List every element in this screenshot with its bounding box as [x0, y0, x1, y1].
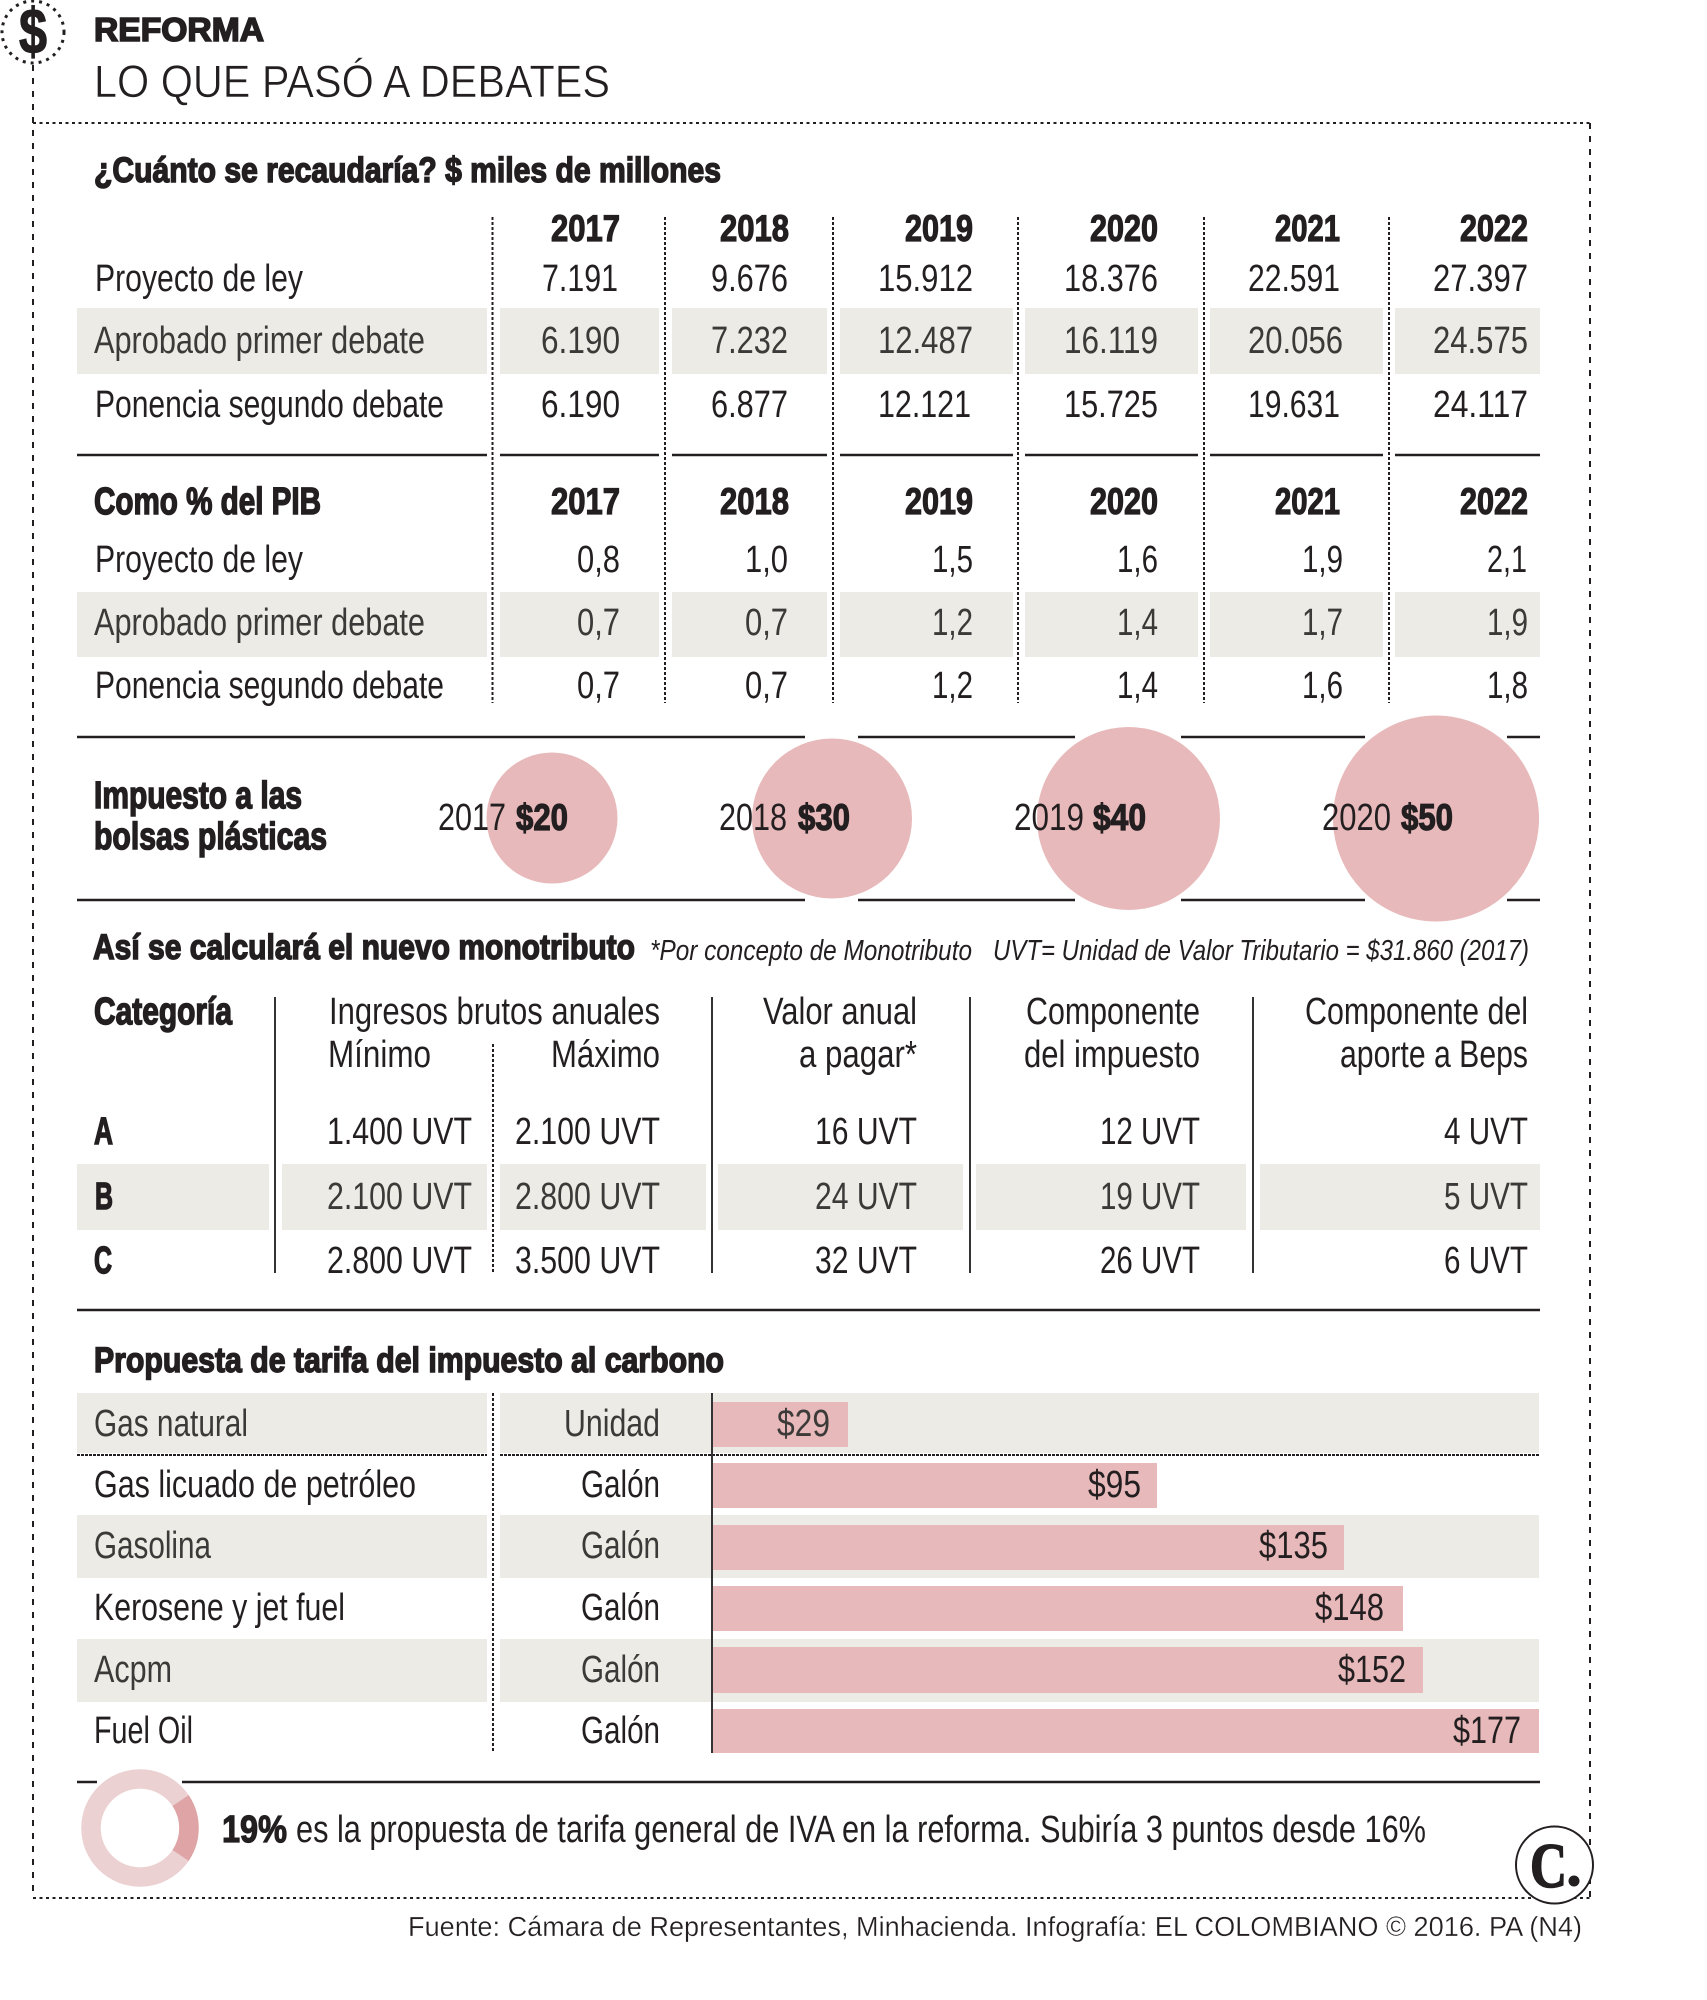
row: acpm: $152 [1338, 1649, 1406, 1691]
table: miles de millones: 6.877 [711, 384, 788, 426]
bubble: 2020 $50: 2020 [1322, 797, 1391, 839]
title block: REFORMA [94, 11, 264, 48]
bubble: 2018 $30: $30 [798, 797, 850, 838]
panel: tarifa de IVA [77, 1779, 1540, 1877]
table: miles de millones: Ponencia segundo debate [95, 384, 444, 426]
table: miles de millones: Proyecto de ley [95, 258, 303, 300]
table: miles de millones: 24.117 [1433, 384, 1528, 426]
row: gas licuado: Gas licuado de petróleo [94, 1464, 416, 1506]
row C: 2.800 UVT [327, 1240, 472, 1282]
table: como % del PIB: 2017 [551, 481, 620, 522]
row B [95, 1176, 1528, 1218]
row A: 16 UVT [815, 1111, 917, 1153]
table: como % del PIB: 0,7 [577, 665, 620, 707]
table: miles de millones: 12.487 [878, 320, 973, 362]
icon: dollar badge [2, 0, 64, 67]
row: gas natural: Unidad [564, 1403, 660, 1445]
table: como % del PIB: 2,1 [1487, 539, 1527, 581]
note: concepto y UVT: UVT= Unidad de Valor Tributario = $31.860 (2017) [993, 935, 1529, 967]
table: como % del PIB: 1,6 [1302, 665, 1343, 707]
logo: El Colombiano: C [1530, 1830, 1567, 1901]
heading: cuánto se recaudaría: ¿Cuánto se recaudaría? $ miles de millones [94, 151, 721, 190]
heading: impuesto a las bolsas: Impuesto a las [94, 775, 302, 817]
bubble: 2020 $50 [1322, 716, 1539, 922]
table: miles de millones: 2017 [551, 208, 620, 249]
row: gas natural: Gas natural [94, 1403, 248, 1445]
table: como % del PIB: 1,7 [1302, 602, 1343, 644]
table header [94, 991, 1528, 1076]
row: gas natural: $29 [777, 1403, 830, 1445]
row: gas licuado: Galón [581, 1464, 660, 1506]
row: fuel oil [94, 1710, 1521, 1752]
row A: 12 UVT [1100, 1111, 1200, 1153]
table: miles de millones: 7.191 [542, 258, 618, 300]
table: como % del PIB: 1,2 [932, 665, 973, 707]
table: como % del PIB: 1,5 [932, 539, 973, 581]
table: miles de millones: 6.190 [541, 320, 620, 362]
row: fuel oil: Galón [581, 1710, 660, 1752]
table: como % del PIB: 0,7 [745, 665, 788, 707]
row: kerosene: Kerosene y jet fuel [94, 1587, 345, 1629]
note: concepto y UVT [650, 935, 1529, 967]
row: gas licuado [94, 1464, 1141, 1506]
table: como % del PIB: 1,0 [745, 539, 788, 581]
logo: El Colombiano [1516, 1826, 1593, 1904]
table: como % del PIB: 2020 [1090, 481, 1158, 522]
title block: LO QUE PASÓ A DEBATES [94, 56, 610, 107]
row: gas licuado: $95 [1088, 1464, 1141, 1506]
row B: 19 UVT [1100, 1176, 1200, 1218]
row C: 6 UVT [1444, 1240, 1528, 1282]
heading: impuesto a las bolsas [94, 775, 327, 858]
table: como % del PIB: 1,4 [1117, 665, 1158, 707]
table: miles de millones: 24.575 [1433, 320, 1528, 362]
table header: a pagar* [799, 1034, 917, 1076]
row: kerosene: $148 [1315, 1587, 1384, 1629]
row: gasolina: Gasolina [94, 1525, 212, 1567]
row: gas natural [94, 1403, 830, 1445]
bubble: 2017 $20 [438, 752, 618, 884]
row: gasolina: Galón [581, 1525, 660, 1567]
table: miles de millones: 20.056 [1248, 320, 1343, 362]
heading: impuesto al carbono: Propuesta de tarifa del impuesto al carbono [94, 1341, 724, 1380]
callout text: IVA: 19% [222, 1809, 287, 1851]
note: concepto y UVT: *Por concepto de Monotributo [650, 935, 972, 967]
row C: 26 UVT [1100, 1240, 1200, 1282]
source line: Fuente: Cámara de Representantes, Minhacienda. Infografía: EL COLOMBIANO © 2016. PA (N4) [408, 1911, 1582, 1942]
row B: 5 UVT [1444, 1176, 1528, 1218]
table: como % del PIB: Como % del PIB [94, 481, 321, 523]
table: miles de millones: 9.676 [711, 258, 788, 300]
table: miles de millones: Aprobado primer debate [94, 320, 425, 362]
table: como % del PIB: 1,4 [1117, 602, 1158, 644]
panel: monotributo [77, 928, 1540, 1310]
table: miles de millones: 2020 [1090, 208, 1158, 249]
row: gasolina [94, 1525, 1328, 1567]
row C [94, 1240, 1528, 1282]
row: acpm: Galón [581, 1649, 660, 1691]
table: miles de millones: 22.591 [1248, 258, 1340, 300]
row C: 3.500 UVT [515, 1240, 660, 1282]
row A: 1.400 UVT [327, 1111, 472, 1153]
table: como % del PIB: 1,9 [1302, 539, 1343, 581]
table header: Componente [1026, 991, 1200, 1033]
row: fuel oil: Fuel Oil [94, 1710, 193, 1752]
row A: A [94, 1111, 113, 1153]
row: fuel oil: $177 [1453, 1710, 1521, 1752]
row A [94, 1111, 1528, 1153]
table header: Categoría [94, 991, 233, 1033]
table: como % del PIB: Proyecto de ley [95, 539, 303, 581]
table: como % del PIB: Aprobado primer debate [94, 602, 425, 644]
table: como % del PIB [94, 481, 1528, 707]
table: miles de millones: 2022 [1460, 208, 1528, 249]
panel: impuesto a las bolsas plásticas [77, 716, 1540, 922]
table: miles de millones: 6.190 [541, 384, 620, 426]
title block [94, 11, 610, 107]
row: acpm [94, 1649, 1406, 1691]
bubble: 2017 $20: 2017 [438, 797, 506, 839]
bubble: 2019 $40 [1014, 727, 1220, 910]
table header: aporte a Beps [1340, 1034, 1528, 1076]
grey row bands [77, 308, 1540, 657]
table: miles de millones: 2019 [905, 208, 973, 249]
panel: recaudo tables [77, 151, 1540, 707]
table: miles de millones: 27.397 [1433, 258, 1528, 300]
table header: Mínimo [328, 1034, 431, 1076]
table: miles de millones: 7.232 [711, 320, 788, 362]
table: miles de millones: 15.725 [1064, 384, 1158, 426]
table: miles de millones: 18.376 [1064, 258, 1158, 300]
table header: Valor anual [763, 991, 917, 1033]
row B: B [95, 1176, 113, 1218]
donut chart: 19% [91, 1779, 189, 1877]
table: miles de millones: 2018 [720, 208, 789, 249]
row A: 2.100 UVT [515, 1111, 660, 1153]
table: miles de millones: 2021 [1275, 208, 1340, 249]
table: como % del PIB: 0,8 [577, 539, 620, 581]
table: miles de millones: 16.119 [1064, 320, 1158, 362]
table: como % del PIB: 1,9 [1487, 602, 1528, 644]
row B: 2.800 UVT [515, 1176, 660, 1218]
table: miles de millones: 12.121 [878, 384, 971, 426]
row B: 24 UVT [815, 1176, 917, 1218]
bubble: 2018 $30 [719, 738, 912, 898]
row: gasolina: $135 [1259, 1525, 1328, 1567]
row B: 2.100 UVT [327, 1176, 472, 1218]
bubble: 2019 $40: $40 [1093, 797, 1146, 838]
table header: del impuesto [1024, 1034, 1200, 1076]
bar chart: tarifas [713, 1402, 1539, 1753]
bubble: 2019 $40: 2019 [1014, 797, 1084, 839]
table: como % del PIB: 0,7 [745, 602, 788, 644]
table: como % del PIB: 1,8 [1487, 665, 1528, 707]
table: miles de millones: 15.912 [878, 258, 973, 300]
heading: nuevo monotributo: Así se calculará el nuevo monotributo [93, 928, 635, 967]
table: como % del PIB: 2018 [720, 481, 789, 522]
table header: Ingresos brutos anuales [329, 991, 660, 1033]
table: como % del PIB: Ponencia segundo debate [95, 665, 444, 707]
table: como % del PIB: 2021 [1275, 481, 1340, 522]
callout text: IVA: es la propuesta de tarifa general de IVA en la reforma. Subiría 3 puntos desde 16% [296, 1809, 1426, 1851]
row A: 4 UVT [1444, 1111, 1528, 1153]
panel: impuesto al carbono [77, 1341, 1539, 1753]
table header: Máximo [551, 1034, 660, 1076]
row C: 32 UVT [815, 1240, 917, 1282]
table: como % del PIB: 2022 [1460, 481, 1528, 522]
table: miles de millones [94, 208, 1528, 426]
table: como % del PIB: 1,6 [1117, 539, 1158, 581]
table header: Componente del [1305, 991, 1528, 1033]
bubble: 2018 $30: 2018 [719, 797, 787, 839]
heading: impuesto a las bolsas: bolsas plásticas [94, 816, 327, 858]
row: acpm: Acpm [94, 1649, 172, 1691]
bubble: 2017 $20: $20 [516, 797, 568, 838]
row C: C [94, 1240, 112, 1282]
row: kerosene [94, 1587, 1384, 1629]
table: como % del PIB: 2019 [905, 481, 973, 522]
table: miles de millones: 19.631 [1248, 384, 1340, 426]
bubble: 2020 $50: $50 [1401, 797, 1453, 838]
table: como % del PIB: 0,7 [577, 602, 620, 644]
row: kerosene: Galón [581, 1587, 660, 1629]
table: como % del PIB: 1,2 [932, 602, 973, 644]
